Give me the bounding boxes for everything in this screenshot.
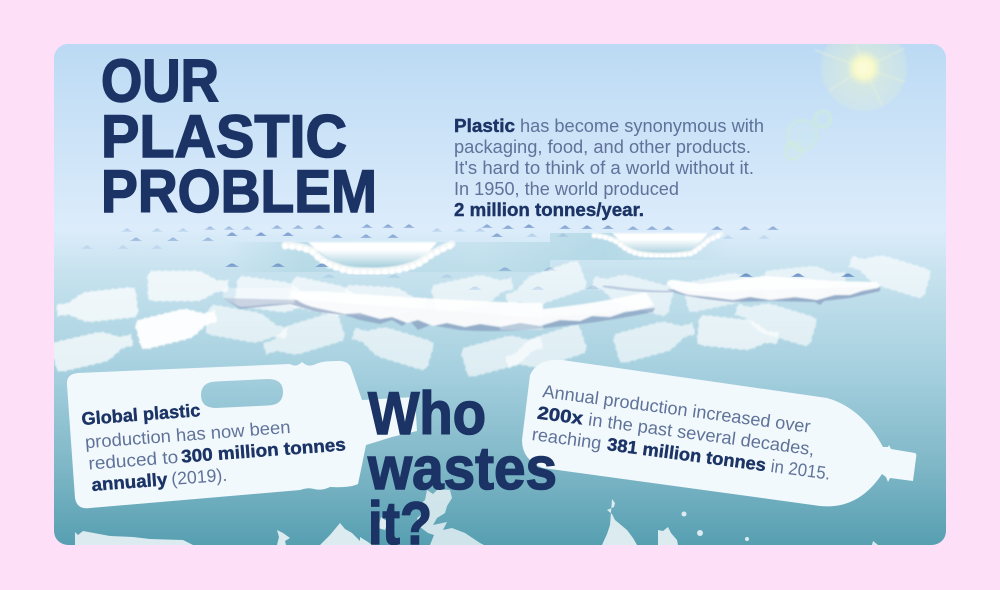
- bottle 2: [148, 271, 228, 301]
- intro text: In 1950, the world produced: [454, 179, 679, 199]
- bottle 19: [684, 272, 764, 312]
- bottle 10: [344, 285, 426, 319]
- icebergs along bottom edge: [75, 489, 878, 545]
- plastic bag: large: [285, 242, 452, 273]
- intro text: It's hard to think of a world without it.: [454, 158, 754, 178]
- bottle 17: [697, 315, 779, 353]
- heading: who wastes it: Who: [368, 380, 486, 447]
- callout text: annually: [91, 469, 168, 495]
- callout text: Global plastic: [81, 400, 201, 429]
- bottle 13: [506, 324, 588, 369]
- callout text: (2019).: [171, 465, 228, 489]
- bottle 21: [848, 255, 931, 299]
- sea and sky gradient: [54, 44, 946, 545]
- callout text: [531, 380, 838, 484]
- long plastic film: right: [667, 276, 880, 305]
- callout text: Annual production increased over: [541, 381, 812, 437]
- bottle 9: [290, 276, 352, 316]
- bottle callout: global plastic: [67, 361, 417, 508]
- waves over bottles: [467, 274, 856, 290]
- bottle 12: [460, 335, 543, 378]
- intro text: [454, 116, 764, 220]
- icon: sun with lens flare: [784, 44, 906, 160]
- horizon water patch: [253, 233, 690, 272]
- bottle shape with handle: [67, 361, 417, 508]
- bottle 5: [205, 304, 288, 344]
- callout text: [82, 404, 346, 492]
- callout text: in 2015.: [770, 456, 832, 484]
- title: OUR: [101, 48, 219, 114]
- bottle shape: [522, 360, 916, 506]
- intro text: 2 million tonnes/year.: [454, 200, 644, 220]
- callout text: 381 million tonnes: [606, 434, 767, 475]
- bottle callout: annual production: [522, 360, 916, 506]
- plastic bag: small: [594, 233, 721, 256]
- callout text: 300 million tonnes: [180, 434, 346, 467]
- heading: who wastes it: [367, 380, 557, 557]
- bottle 3: [134, 308, 217, 350]
- bottle 18: [734, 302, 817, 347]
- long plastic film: left: [223, 288, 655, 331]
- bottle 11: [430, 274, 514, 302]
- title: [101, 48, 377, 225]
- bottle 15: [592, 274, 674, 317]
- bottle 20: [764, 263, 846, 301]
- title: PLASTIC: [101, 103, 347, 170]
- bottle 8: [234, 275, 300, 314]
- thin film behind: [603, 286, 672, 292]
- heading: who wastes it: it?: [368, 490, 432, 557]
- callout text: reduced to: [88, 447, 179, 474]
- mid-water waves: [224, 264, 558, 278]
- callout text: in the past several decades,: [587, 409, 816, 459]
- bottle 1: [56, 287, 138, 325]
- bottle 4: [54, 331, 134, 372]
- intro text: has become synonymous with: [520, 116, 764, 136]
- callout text: production has now been: [84, 417, 291, 452]
- heading: who wastes it: wastes: [367, 435, 557, 502]
- intro text: packaging, food, and other products.: [454, 137, 751, 157]
- distant waves: [80, 224, 780, 249]
- callout text: reaching: [531, 424, 603, 453]
- callout text: 200x: [536, 403, 584, 429]
- bottle 7: [351, 326, 434, 371]
- intro text: Plastic: [454, 116, 515, 136]
- floating plastic bottles: [51, 247, 932, 378]
- bottle 6: [263, 313, 346, 356]
- title: PROBLEM: [101, 158, 377, 225]
- bottle 14: [505, 260, 587, 304]
- bottle 16: [612, 321, 696, 364]
